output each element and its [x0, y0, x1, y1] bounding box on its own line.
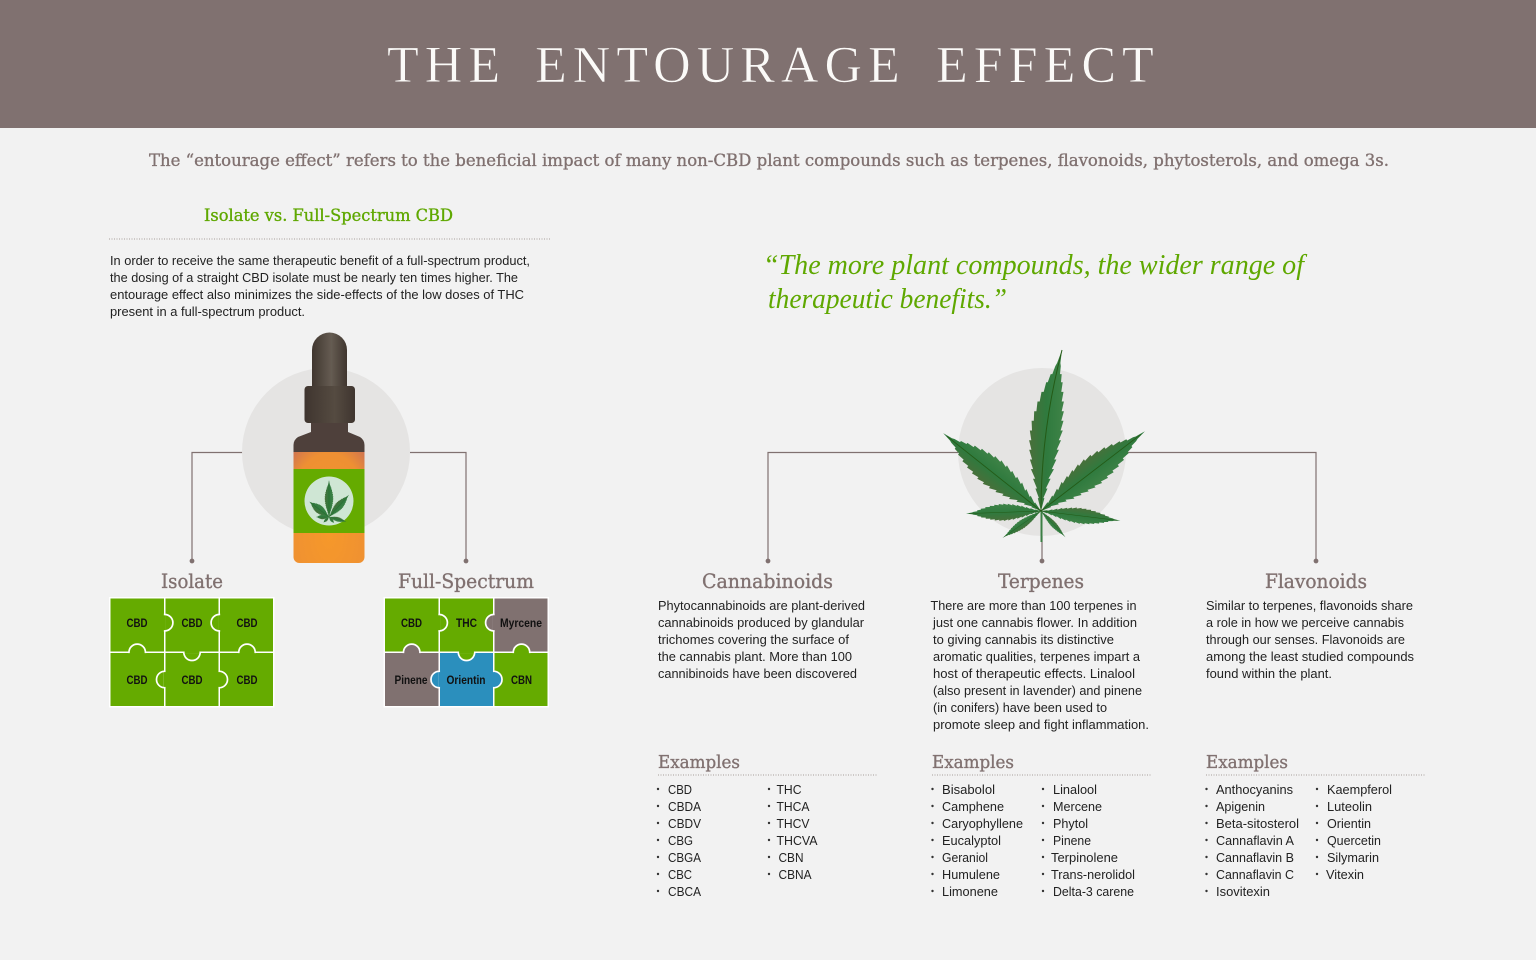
list: cannabinoid examples: CBN	[778, 850, 804, 865]
list: cannabinoid examples: CBCA	[668, 884, 701, 899]
icon: circle behind leaf	[958, 368, 1126, 536]
heading: flavonoids: Flavonoids	[1265, 570, 1367, 593]
text: cannabinoids description: cannibinoids have been discovered	[658, 666, 857, 681]
list: terpene examples: Camphene	[942, 799, 1004, 814]
list: terpene examples: Limonene	[942, 884, 998, 899]
list: terpene examples: Eucalyptol	[942, 833, 1001, 848]
title: ENTOURAGE	[535, 37, 906, 94]
list: flavonoid examples: Cannaflavin B	[1216, 850, 1294, 865]
text: terpenes description: aromatic qualities, terpenes impart a	[933, 649, 1141, 664]
list: terpene examples: Bisabolol	[942, 782, 995, 797]
heading: examples: Examples	[658, 752, 740, 773]
text: terpenes description	[930, 598, 1149, 732]
text: flavonoids description: through our senses. Flavonoids are	[1206, 632, 1405, 647]
puzzle: isolate: CBD	[236, 616, 258, 630]
icon: circle behind bottle	[242, 368, 410, 536]
text: cannabinoids description: trichomes covering the surface of	[658, 632, 849, 647]
list: cannabinoid examples: CBDV	[668, 816, 701, 831]
heading: isolate vs full-spectrum: Isolate vs. Full-Spectrum CBD	[204, 206, 453, 226]
title	[387, 37, 1160, 94]
text: flavonoids description: among the least studied compounds	[1206, 649, 1414, 664]
connector lines: plant	[766, 452, 1318, 563]
list: cannabinoid examples: CBGA	[668, 850, 701, 865]
text: cannabinoids description: Phytocannabinoids are plant-derived	[658, 598, 865, 613]
dropper bulb	[312, 332, 347, 388]
paragraph: dosing: present in a full-spectrum product.	[110, 304, 305, 319]
label circle	[304, 476, 354, 526]
heading: cannabinoids: Cannabinoids	[702, 570, 833, 593]
bottle shoulder	[294, 420, 364, 453]
puzzle: full-spectrum: CBN	[511, 673, 532, 687]
bottle body	[294, 452, 364, 563]
puzzle: full-spectrum: Orientin	[446, 673, 486, 687]
list: cannabinoid examples: CBC	[668, 867, 692, 882]
list: terpene examples: Delta-3 carene	[1053, 884, 1134, 899]
list: terpene examples	[931, 782, 1135, 899]
header banner	[0, 0, 1536, 128]
puzzle: isolate: CBD	[126, 673, 148, 687]
text: terpenes description: There are more than 100 terpenes in	[930, 598, 1136, 613]
list: flavonoid examples: Cannaflavin A	[1216, 833, 1294, 848]
pull quote: “The more plant compounds, the wider range of	[763, 249, 1308, 281]
panel: flavonoids	[1205, 570, 1426, 899]
list: flavonoid examples: Orientin	[1327, 816, 1371, 831]
list: flavonoid examples: Vitexin	[1326, 867, 1364, 882]
list: flavonoid examples: Isovitexin	[1216, 884, 1270, 899]
paragraph: dosing: entourage effect also minimizes the side-effects of the low doses of THC	[110, 287, 524, 302]
list: terpene examples: Trans-nerolidol	[1051, 867, 1135, 882]
text: cannabinoids description: cannabinoids produced by glandular	[658, 615, 865, 630]
list: terpene examples: Caryophyllene	[942, 816, 1023, 831]
heading: isolate: Isolate	[161, 570, 223, 593]
icon: cannabis leaf	[934, 350, 1154, 542]
puzzle: isolate: CBD	[182, 673, 203, 687]
list: flavonoid examples: Quercetin	[1327, 833, 1381, 848]
list: terpene examples: Geraniol	[942, 850, 988, 865]
heading: full-spectrum: Full-Spectrum	[398, 570, 534, 593]
panel: isolate vs full-spectrum	[109, 206, 551, 319]
text: terpenes description: just one cannabis flower. In addition	[932, 615, 1137, 630]
list: cannabinoid examples: THCA	[776, 799, 810, 814]
bottle label	[294, 469, 364, 533]
list: cannabinoid examples: THCVA	[776, 833, 818, 848]
list: flavonoid examples: Silymarin	[1327, 850, 1379, 865]
dropper collar	[304, 386, 355, 423]
list: cannabinoid examples: THC	[776, 782, 802, 797]
list: flavonoid examples: Beta-sitosterol	[1216, 816, 1299, 831]
puzzle: full-spectrum	[384, 597, 549, 708]
list: flavonoid examples: Anthocyanins	[1216, 782, 1293, 797]
text: terpenes description: to giving cannabis its distinctive	[933, 632, 1114, 647]
text: flavonoids description: a role in how we perceive cannabis	[1206, 615, 1404, 630]
list: terpene examples: Phytol	[1053, 816, 1088, 831]
list: cannabinoid examples: CBG	[668, 833, 693, 848]
puzzle: isolate: CBD	[126, 616, 148, 630]
heading: examples: Examples	[1206, 752, 1288, 773]
text: terpenes description: (in conifers) have been used to	[933, 700, 1107, 715]
puzzle: isolate: CBD	[236, 673, 258, 687]
list: flavonoid examples: Kaempferol	[1327, 782, 1392, 797]
puzzle: full-spectrum: Pinene	[394, 673, 428, 687]
list: terpene examples: Terpinolene	[1051, 850, 1118, 865]
label leaf	[307, 480, 352, 524]
intro sentence: The “entourage effect” refers to the beneficial impact of many non-CBD plant compounds such as terpenes, flavonoids, phytosterols, and omega 3s.	[149, 151, 1389, 171]
panel: terpenes	[930, 570, 1152, 899]
text: terpenes description: host of therapeutic effects. Linalool	[933, 666, 1135, 681]
icon: dropper bottle	[294, 332, 364, 563]
paragraph: dosing: the dosing of a straight CBD isolate must be nearly ten times higher. The	[110, 270, 518, 285]
text: flavonoids description: found within the plant.	[1206, 666, 1332, 681]
list: cannabinoid examples: CBDA	[668, 799, 701, 814]
puzzle: full-spectrum: Myrcene	[500, 616, 542, 630]
list: terpene examples: Linalool	[1053, 782, 1097, 797]
list: cannabinoid examples	[657, 782, 818, 899]
list: flavonoid examples	[1205, 782, 1392, 899]
text: flavonoids description: Similar to terpenes, flavonoids share	[1206, 598, 1413, 613]
paragraph: dosing: In order to receive the same therapeutic benefit of a full-spectrum product,	[110, 253, 530, 268]
text: cannabinoids description	[658, 598, 865, 681]
pull quote	[763, 249, 1308, 315]
list: terpene examples: Humulene	[942, 867, 1000, 882]
panel: cannabinoids	[657, 570, 878, 899]
list: flavonoid examples: Apigenin	[1216, 799, 1265, 814]
text: terpenes description: (also present in lavender) and pinene	[933, 683, 1142, 698]
list: cannabinoid examples: CBD	[668, 782, 692, 797]
list: terpene examples: Pinene	[1053, 833, 1091, 848]
puzzle: isolate: CBD	[182, 616, 203, 630]
puzzle: full-spectrum: THC	[456, 616, 477, 630]
list: cannabinoid examples: CBNA	[778, 867, 812, 882]
text: flavonoids description	[1206, 598, 1414, 681]
puzzle: isolate	[109, 597, 274, 708]
list: cannabinoid examples: THCV	[776, 816, 810, 831]
text: cannabinoids description: the cannabis plant. More than 100	[658, 649, 852, 664]
heading: terpenes: Terpenes	[998, 570, 1084, 593]
text: terpenes description: promote sleep and fight inflammation.	[933, 717, 1149, 732]
list: flavonoid examples: Luteolin	[1327, 799, 1372, 814]
puzzle: full-spectrum: CBD	[401, 616, 422, 630]
list: flavonoid examples: Cannaflavin C	[1216, 867, 1294, 882]
list: terpene examples: Mercene	[1053, 799, 1102, 814]
paragraph: dosing	[110, 253, 530, 319]
heading: examples: Examples	[932, 752, 1014, 773]
connector lines: bottle	[190, 452, 468, 563]
title: THE	[387, 37, 506, 94]
title: EFFECT	[936, 37, 1160, 94]
pull quote: therapeutic benefits.”	[768, 283, 1007, 315]
